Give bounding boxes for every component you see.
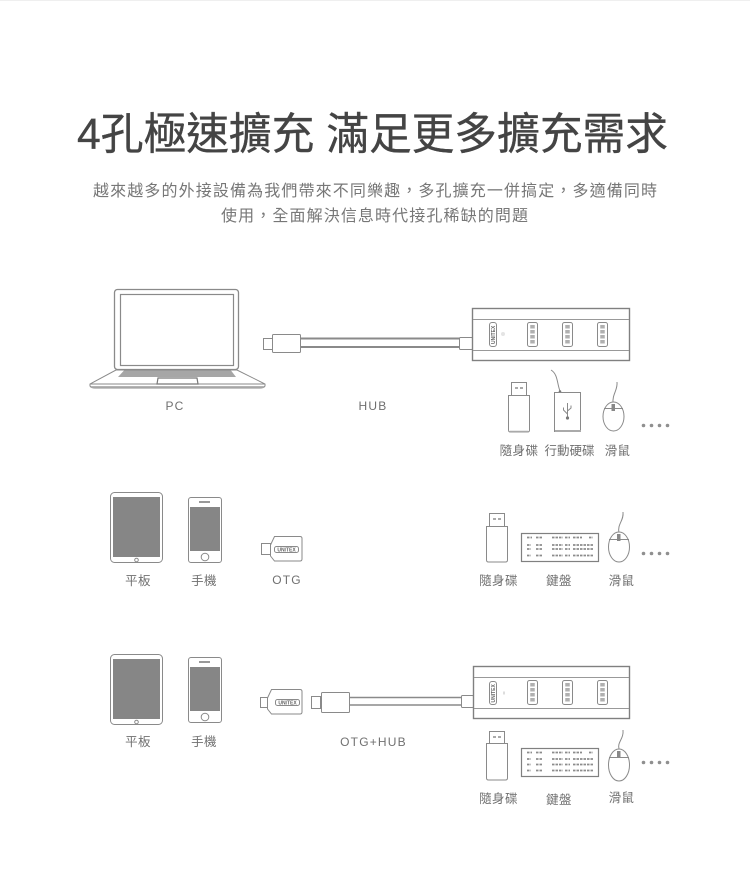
label: keyboard: 鍵盤: [546, 792, 572, 807]
label: keyboard: 鍵盤: [546, 573, 572, 588]
icon: mouse: [603, 382, 624, 431]
icon: USB-C cable to hub: [264, 334, 472, 352]
label: portable drive: 行動硬碟: [544, 444, 595, 458]
title: 4孔極速擴充 滿足更多擴充需求: [77, 110, 668, 159]
icon: phone: [188, 658, 222, 722]
icon: mouse: [608, 512, 630, 562]
icon: hub: [472, 308, 630, 360]
icon: USB stick: [486, 732, 508, 780]
icon: keyboard: [522, 534, 598, 562]
subtitle text: 越來越多的外接設備為我們帶來不同樂趣，多孔擴充一併搞定，多適備同時: [93, 181, 657, 200]
icon: OTG adapter: [262, 536, 302, 561]
subtitle text: [93, 181, 657, 225]
icon: mouse: [608, 730, 630, 781]
subtitle text: 使用，全面解決信息時代接孔稀缺的問題: [221, 207, 528, 225]
label: OTG: OTG: [272, 573, 302, 587]
icon: USB stick: [486, 514, 508, 562]
icon: tablet: [110, 492, 162, 562]
label: HUB: HUB: [359, 399, 387, 413]
icon: USB-C cable: [312, 692, 474, 712]
label: tablet: 平板: [125, 735, 151, 749]
icon: OTG adapter: UNITEX: [278, 700, 297, 706]
icon: phone: [188, 498, 222, 562]
icon: laptop: [90, 290, 265, 388]
icon: hub: UNITEX: [491, 325, 497, 344]
dots: [642, 424, 669, 427]
icon: USB stick: [508, 382, 530, 432]
icon: OTG adapter: UNITEX: [277, 548, 296, 554]
label: phone: 手機: [191, 573, 217, 588]
dots: [642, 761, 669, 764]
icon: hub: [474, 666, 630, 718]
label: USB stick: 隨身碟: [500, 443, 538, 458]
icon: tablet: [110, 654, 162, 724]
dots: [642, 552, 669, 555]
label: OTG+HUB: OTG+HUB: [340, 735, 407, 749]
label: mouse: 滑鼠: [609, 791, 634, 805]
label: mouse: 滑鼠: [609, 574, 634, 588]
label: tablet: 平板: [125, 574, 151, 588]
icon: OTG adapter: [260, 690, 302, 714]
label: PC: PC: [165, 399, 185, 413]
label: phone: 手機: [191, 734, 217, 749]
icon: keyboard: [522, 748, 598, 776]
icon: portable hard drive: [551, 370, 581, 432]
label: USB stick: 隨身碟: [479, 791, 518, 806]
label: USB stick: 隨身碟: [479, 573, 518, 588]
label: mouse: 滑鼠: [605, 444, 630, 458]
icon: hub: UNITEX: [491, 684, 497, 702]
